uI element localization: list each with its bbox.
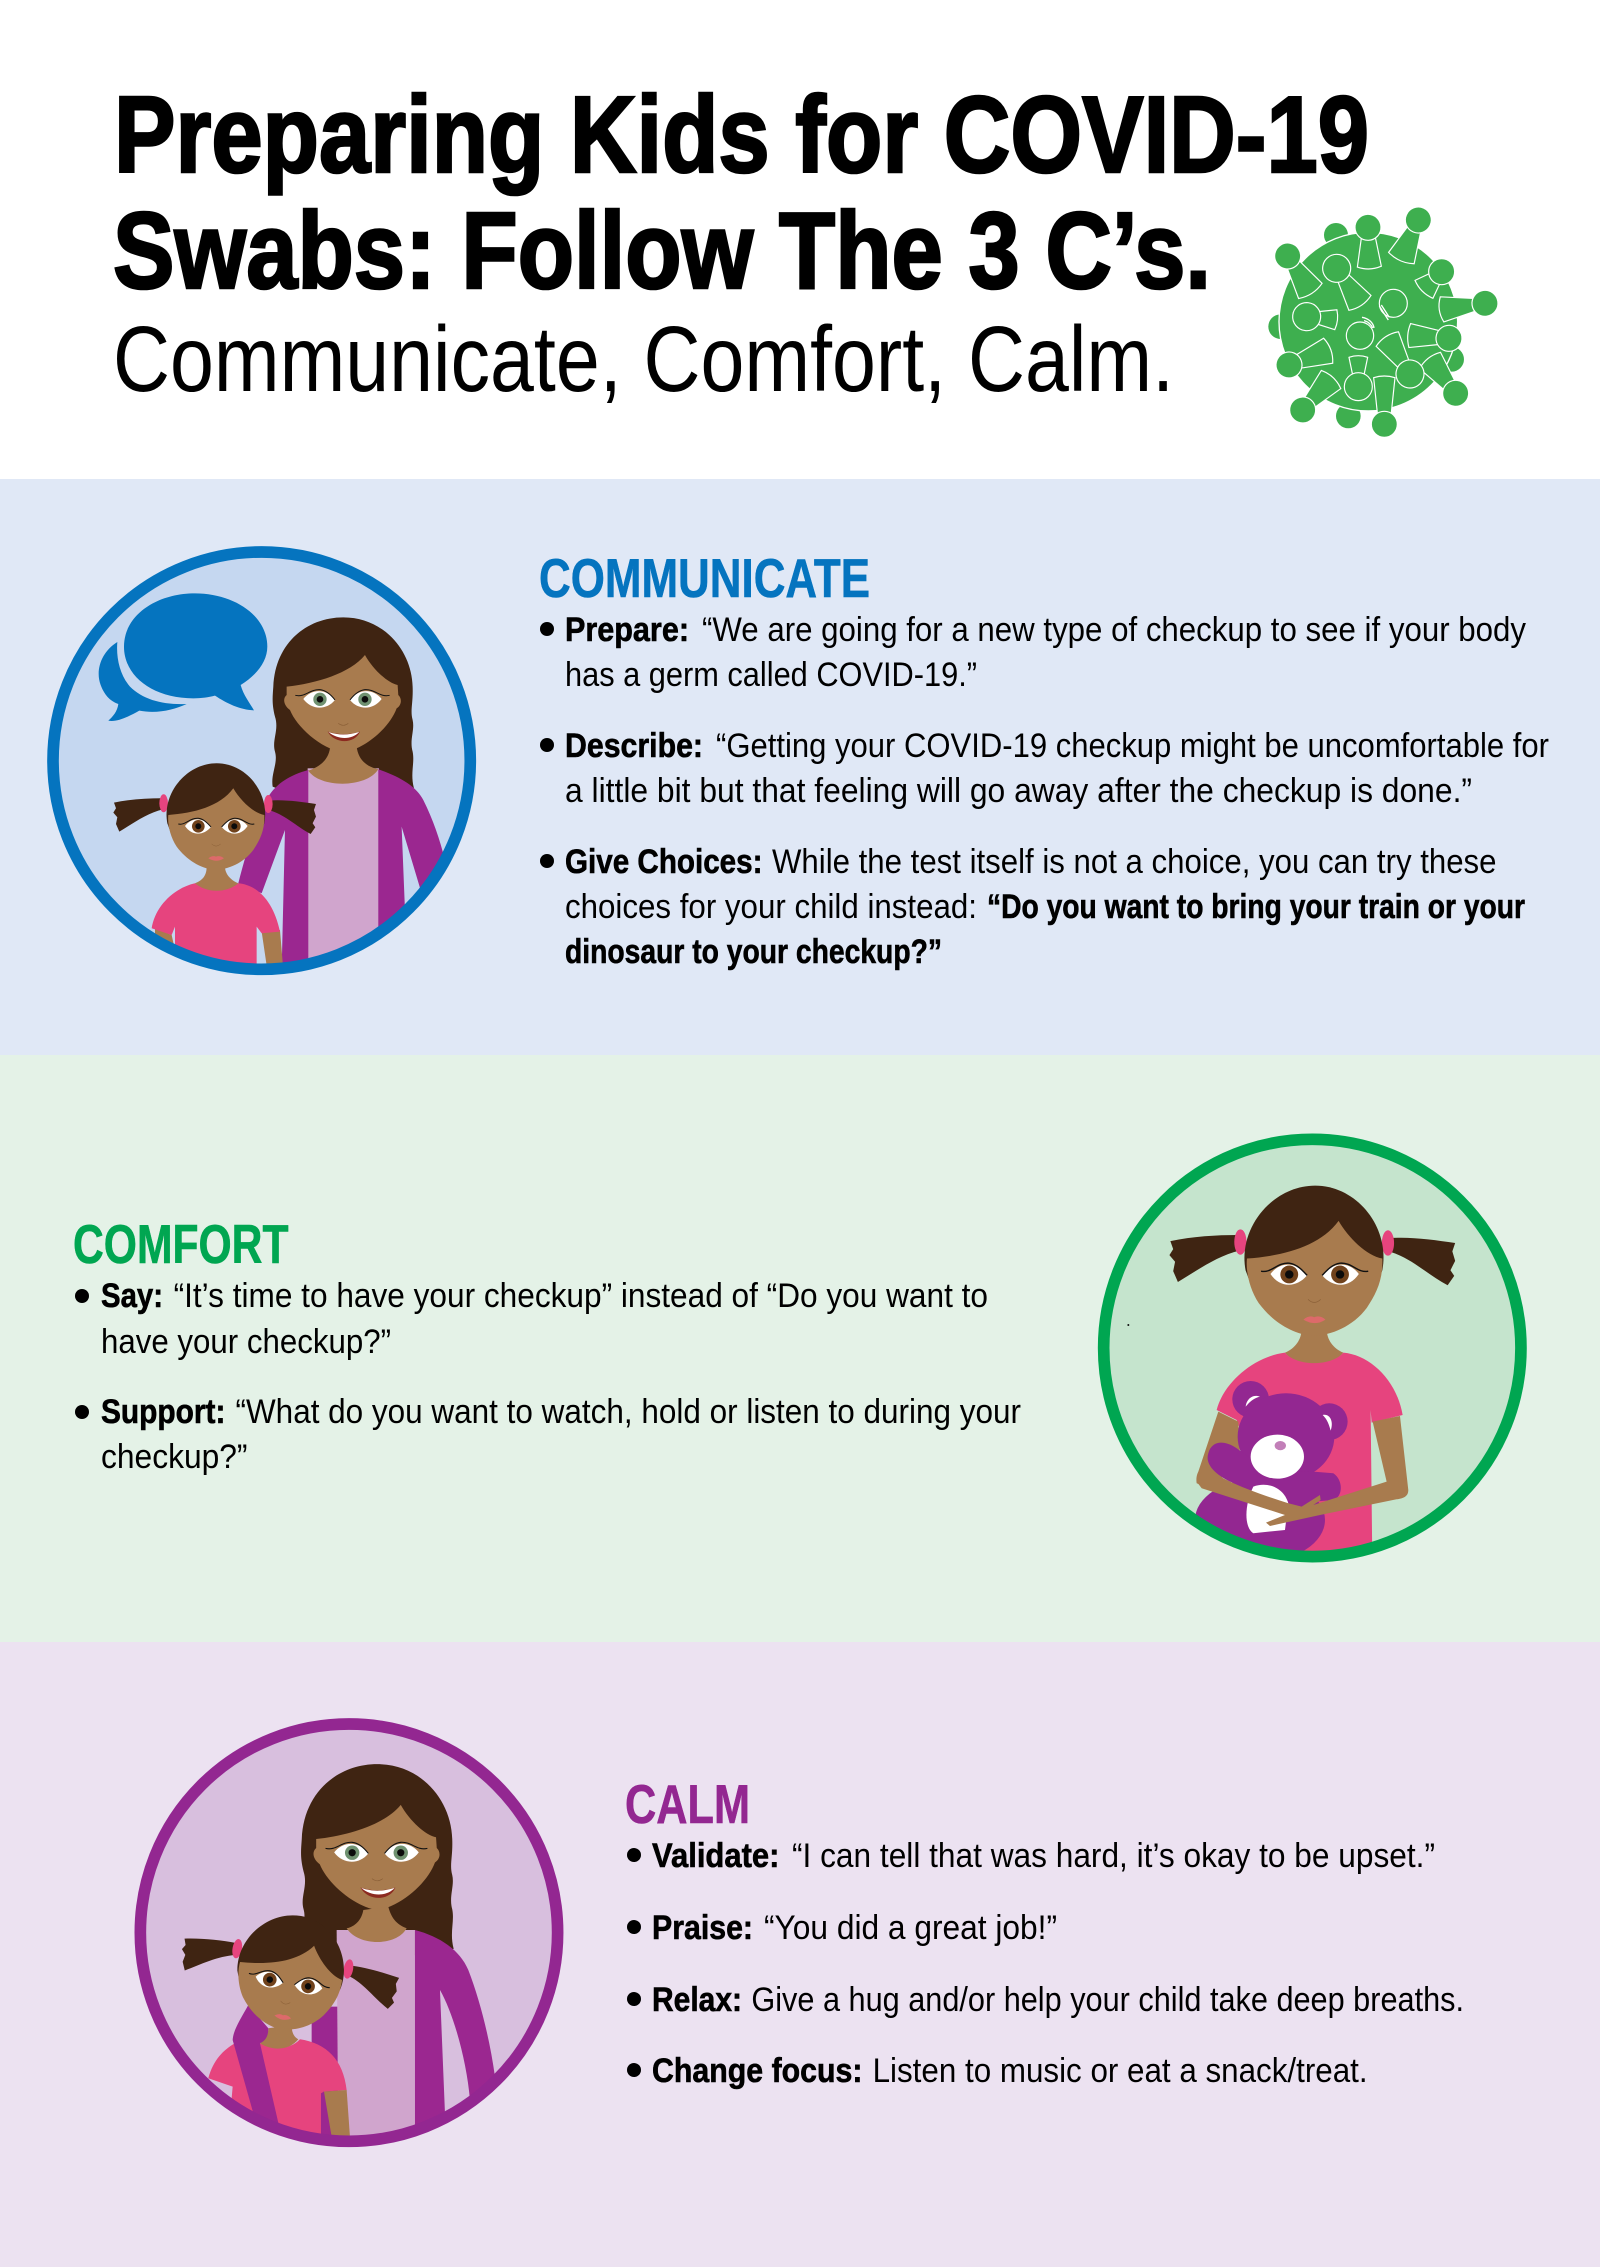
bullet: support	[75, 1393, 1021, 1476]
bullet: relax: Relax:	[652, 1981, 742, 2019]
subtitle: Communicate, Comfort, Calm.	[113, 307, 1174, 411]
bullet: change focus: Change focus:	[652, 2052, 862, 2090]
bullet: support: “What do you want to watch, hold or listen to during your	[236, 1393, 1021, 1431]
bullet: prepare: Prepare:	[565, 611, 689, 649]
bullet: say: “It’s time to have your checkup” instead of “Do you want to	[174, 1277, 988, 1315]
bullet: give choices	[540, 843, 1525, 971]
bullet: give choices: Give Choices:	[565, 843, 762, 881]
bullet: prepare: “We are going for a new type of checkup to see if your body	[702, 611, 1527, 649]
bullet: support: Support:	[101, 1393, 225, 1431]
bullet: relax: Give a hug and/or help your child take deep breaths.	[751, 1981, 1464, 2019]
bullet: give choices: dinosaur to your checkup?”	[565, 933, 942, 971]
bullet: change focus	[627, 2052, 1368, 2090]
panel: comfort	[0, 1055, 1600, 1642]
icon: teddy bear	[1195, 1381, 1348, 1562]
bullet: prepare: has a germ called COVID-19.”	[565, 656, 977, 694]
illustration: mother and daughter with speech bubbles	[53, 552, 470, 982]
bullet: praise: “You did a great job!”	[764, 1909, 1057, 1947]
bullet: give choices: choices for your child instead:	[565, 888, 977, 926]
arms	[1197, 1416, 1408, 1526]
bullet: say	[75, 1277, 988, 1361]
bullet: praise: Praise:	[652, 1909, 753, 1947]
bullet: give choices: While the test itself is not a choice, you can try these	[772, 843, 1496, 881]
bullet: describe	[540, 727, 1549, 810]
title	[113, 74, 1369, 312]
bullet: praise	[627, 1909, 1057, 1947]
heading: calm: CALM	[625, 1773, 750, 1835]
bullet: change focus: Listen to music or eat a snack/treat.	[873, 2052, 1368, 2090]
illustration: mother hugging daughter	[140, 1724, 558, 2147]
bullet: say: Say:	[101, 1277, 163, 1315]
icon: green virus	[1268, 202, 1500, 437]
illustration: girl holding teddy bear	[1104, 1139, 1521, 1562]
heading: comfort: COMFORT	[73, 1213, 288, 1275]
title: Swabs: Follow The 3 C’s.	[113, 190, 1211, 312]
bullet: say: have your checkup?”	[101, 1323, 391, 1361]
figure: daughter	[113, 763, 316, 970]
figure: daughter	[182, 1915, 399, 2136]
heading: communicate: COMMUNICATE	[539, 547, 870, 609]
bullet: describe: Describe:	[565, 727, 703, 765]
bullet: prepare	[540, 611, 1527, 694]
panel: communicate	[0, 479, 1600, 1055]
figure: girl	[1169, 1186, 1455, 1560]
bullet: validate: “I can tell that was hard, it’s okay to be upset.”	[792, 1837, 1435, 1875]
bullet: support: checkup?”	[101, 1438, 248, 1476]
figure: mother	[238, 617, 445, 982]
title: Preparing Kids for COVID-19	[114, 74, 1369, 196]
bullet: validate: Validate:	[652, 1837, 780, 1875]
figure: mother	[301, 1764, 495, 2147]
icon: speech bubbles	[99, 593, 267, 721]
panel: header	[0, 0, 1600, 479]
panel: calm	[0, 1642, 1600, 2267]
bullet: describe: a little bit but that feeling will go away after the checkup is done.”	[565, 772, 1472, 810]
